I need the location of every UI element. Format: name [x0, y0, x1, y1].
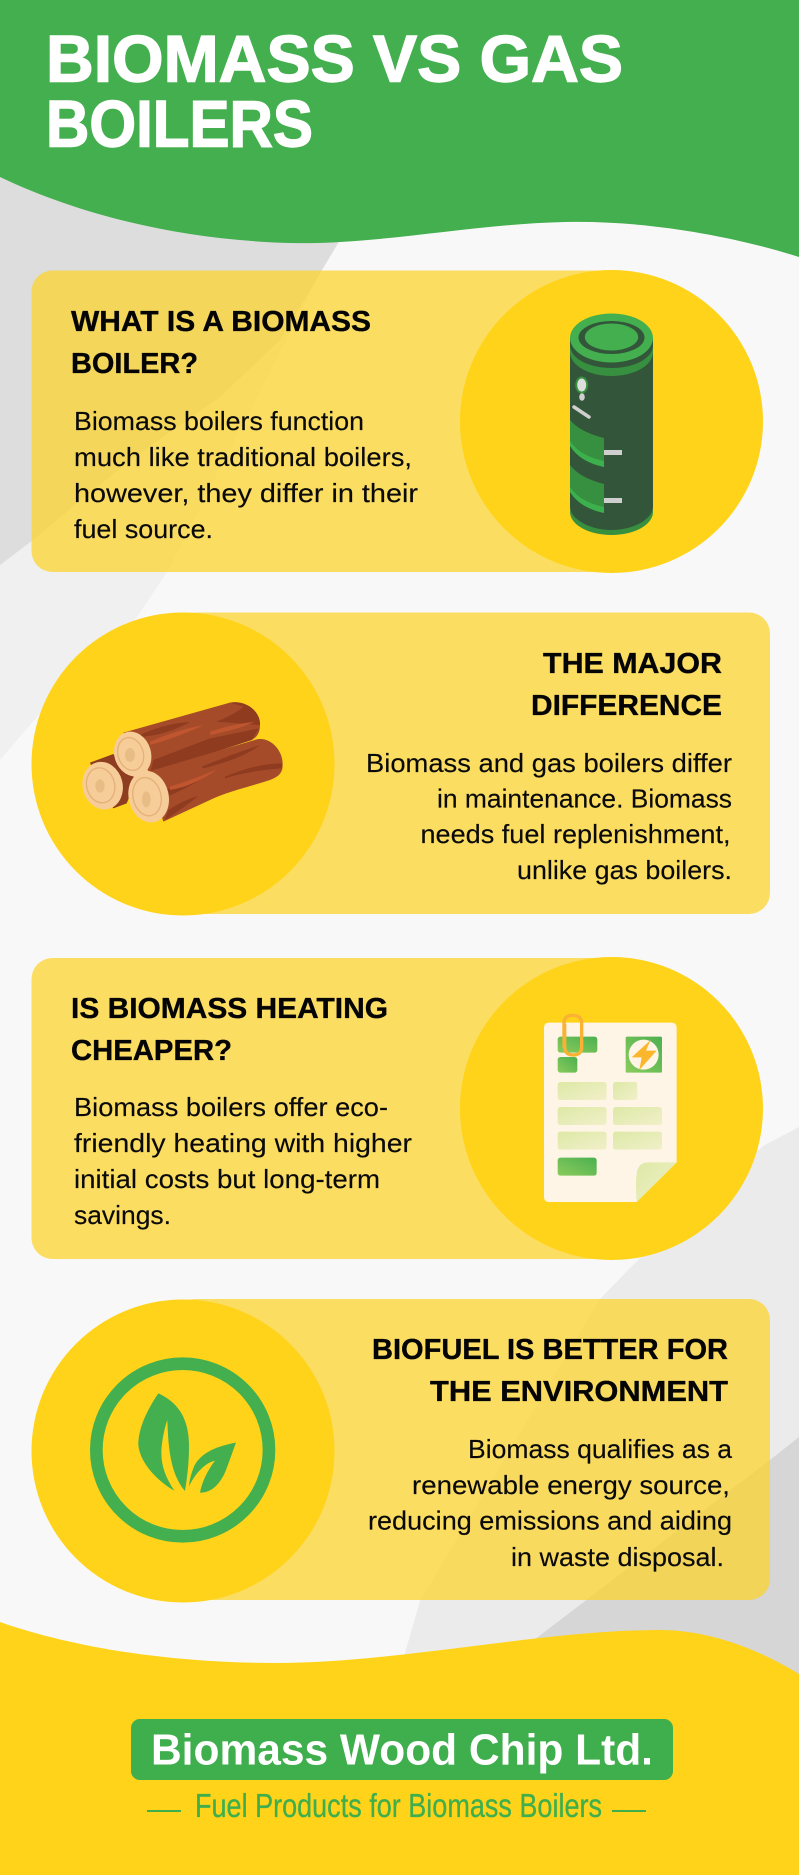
heading: the major difference: DIFFERENCE — [531, 690, 722, 722]
heading: biofuel: BIOFUEL IS BETTER FOR — [372, 1334, 728, 1366]
icon: energy bill document — [544, 1015, 677, 1202]
body text: the major difference: Biomass and gas boilers differ — [366, 748, 732, 778]
body text: is biomass heating cheaper: initial costs but long-term — [74, 1164, 380, 1194]
panel: is biomass heating cheaper — [32, 957, 763, 1260]
body text: the major difference: needs fuel replenishment, — [420, 819, 730, 849]
title — [46, 22, 623, 160]
body text: the major difference: unlike gas boilers. — [517, 855, 732, 885]
body text: biofuel: Biomass qualifies as a — [468, 1434, 733, 1464]
body text: what is a biomass boiler: Biomass boilers function — [74, 406, 364, 436]
footer band — [0, 1622, 799, 1875]
heading: is biomass heating cheaper: CHEAPER? — [71, 1035, 232, 1067]
circle badge: logs — [32, 612, 334, 916]
body text: biofuel: reducing emissions and aiding — [368, 1506, 732, 1536]
icon: wood logs — [77, 702, 283, 826]
logo: Biomass Wood Chip Ltd: Biomass Wood Chip Ltd. — [151, 1726, 653, 1774]
heading: what is a biomass boiler: WHAT IS A BIOMASS — [71, 306, 371, 338]
body text: the major difference — [366, 748, 732, 885]
heading: the major difference: THE MAJOR — [543, 648, 722, 680]
heading: is biomass heating cheaper — [71, 993, 388, 1067]
panel: what is a biomass boiler — [32, 270, 763, 573]
body text: biofuel — [368, 1434, 733, 1572]
body text: what is a biomass boiler: fuel source. — [74, 514, 213, 544]
icon: boiler — [570, 314, 653, 535]
body text: biofuel: in waste disposal. — [511, 1542, 724, 1572]
heading: is biomass heating cheaper: IS BIOMASS HEATING — [71, 993, 388, 1025]
body text: is biomass heating cheaper: savings. — [74, 1200, 171, 1230]
heading: the major difference — [531, 648, 722, 722]
icon: leaf in ring — [96, 1364, 269, 1536]
circle badge: bill — [460, 957, 763, 1260]
body text: what is a biomass boiler — [74, 406, 418, 544]
title: BIOMASS VS GAS — [46, 22, 623, 96]
body text: biofuel: renewable energy source, — [412, 1470, 730, 1500]
body text: is biomass heating cheaper: friendly heating with higher — [74, 1128, 412, 1158]
title: BOILERS — [46, 86, 313, 160]
header banner — [0, 0, 799, 257]
body text: what is a biomass boiler: however, they differ in their — [74, 478, 418, 508]
circle badge: leaf — [32, 1300, 334, 1602]
panel: the major difference — [32, 612, 770, 916]
circle badge: boiler — [460, 270, 763, 573]
body text: what is a biomass boiler: much like traditional boilers, — [74, 442, 412, 472]
panel: biofuel is better for the environment — [32, 1299, 770, 1602]
body text: is biomass heating cheaper: Biomass boilers offer eco- — [74, 1092, 388, 1122]
body text: the major difference: in maintenance. Biomass — [437, 784, 732, 814]
heading: what is a biomass boiler — [71, 306, 371, 380]
heading: biofuel: THE ENVIRONMENT — [430, 1376, 729, 1408]
tagline: Fuel Products for Biomass Boilers — [195, 1787, 602, 1824]
logo: Biomass Wood Chip Ltd — [131, 1719, 673, 1824]
heading: what is a biomass boiler: BOILER? — [71, 348, 198, 380]
body text: is biomass heating cheaper — [74, 1092, 412, 1230]
heading: biofuel — [372, 1334, 729, 1408]
